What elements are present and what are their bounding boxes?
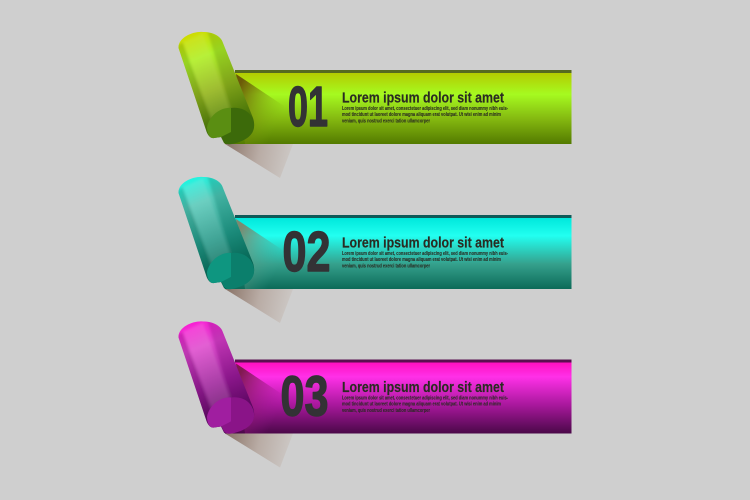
number 02: 02: [282, 220, 330, 284]
ribbon fold shadow 03: [236, 364, 284, 434]
body text 03: [342, 396, 508, 414]
panel: banner 03: [172, 320, 572, 468]
body text 01: veniam, quis nostrud exerci tation ullamcorper: [342, 118, 430, 124]
cast shadow 03: [225, 434, 293, 468]
ribbon 03: [225, 360, 572, 434]
heading 03: Lorem ipsum dolor sit amet: [342, 379, 504, 396]
ribbon fold shadow 02: [236, 219, 284, 289]
body text 01: [342, 106, 508, 124]
number 01: 01: [288, 75, 328, 139]
ribbon fold shadow 01: [236, 74, 284, 144]
body text 01: Lorem ipsum dolor sit amet, consectetuer adipiscing elit, sed diam nonummy nibh euis-: [342, 106, 508, 112]
icon: paper roll 02: [178, 176, 254, 290]
body text 01: mod tincidunt ut laoreet dolore magna aliquam erat volutpat. Ut wisi enim ad minim: [342, 112, 501, 118]
icon: paper roll 03: [178, 321, 254, 434]
number 03: 03: [280, 364, 328, 428]
icon: paper roll 01: [178, 32, 254, 144]
body text 02: veniam, quis nostrud exerci tation ullamcorper: [342, 264, 430, 270]
cast shadow 01: [225, 144, 293, 178]
ribbon 02: [225, 215, 572, 289]
cast shadow 02: [225, 289, 293, 323]
heading 02: Lorem ipsum dolor sit amet: [342, 234, 504, 252]
ribbon 01: [225, 70, 572, 144]
body text 02: Lorem ipsum dolor sit amet, consectetuer adipiscing elit, sed diam nonummy nibh euis-: [342, 251, 508, 257]
body text 03: veniam, quis nostrud exerci tation ullamcorper: [342, 408, 430, 414]
panel: banner 02: [172, 175, 572, 323]
body text 02: [342, 251, 508, 270]
body text 03: mod tincidunt ut laoreet dolore magna aliquam erat volutpat. Ut wisi enim ad minim: [342, 402, 501, 408]
heading 01: Lorem ipsum dolor sit amet: [342, 90, 504, 106]
panel: banner 01: [172, 30, 572, 178]
body text 02: mod tincidunt ut laoreet dolore magna aliquam erat volutpat. Ut wisi enim ad minim: [342, 257, 501, 263]
body text 03: Lorem ipsum dolor sit amet, consectetuer adipiscing elit, sed diam nonummy nibh euis-: [342, 396, 508, 402]
